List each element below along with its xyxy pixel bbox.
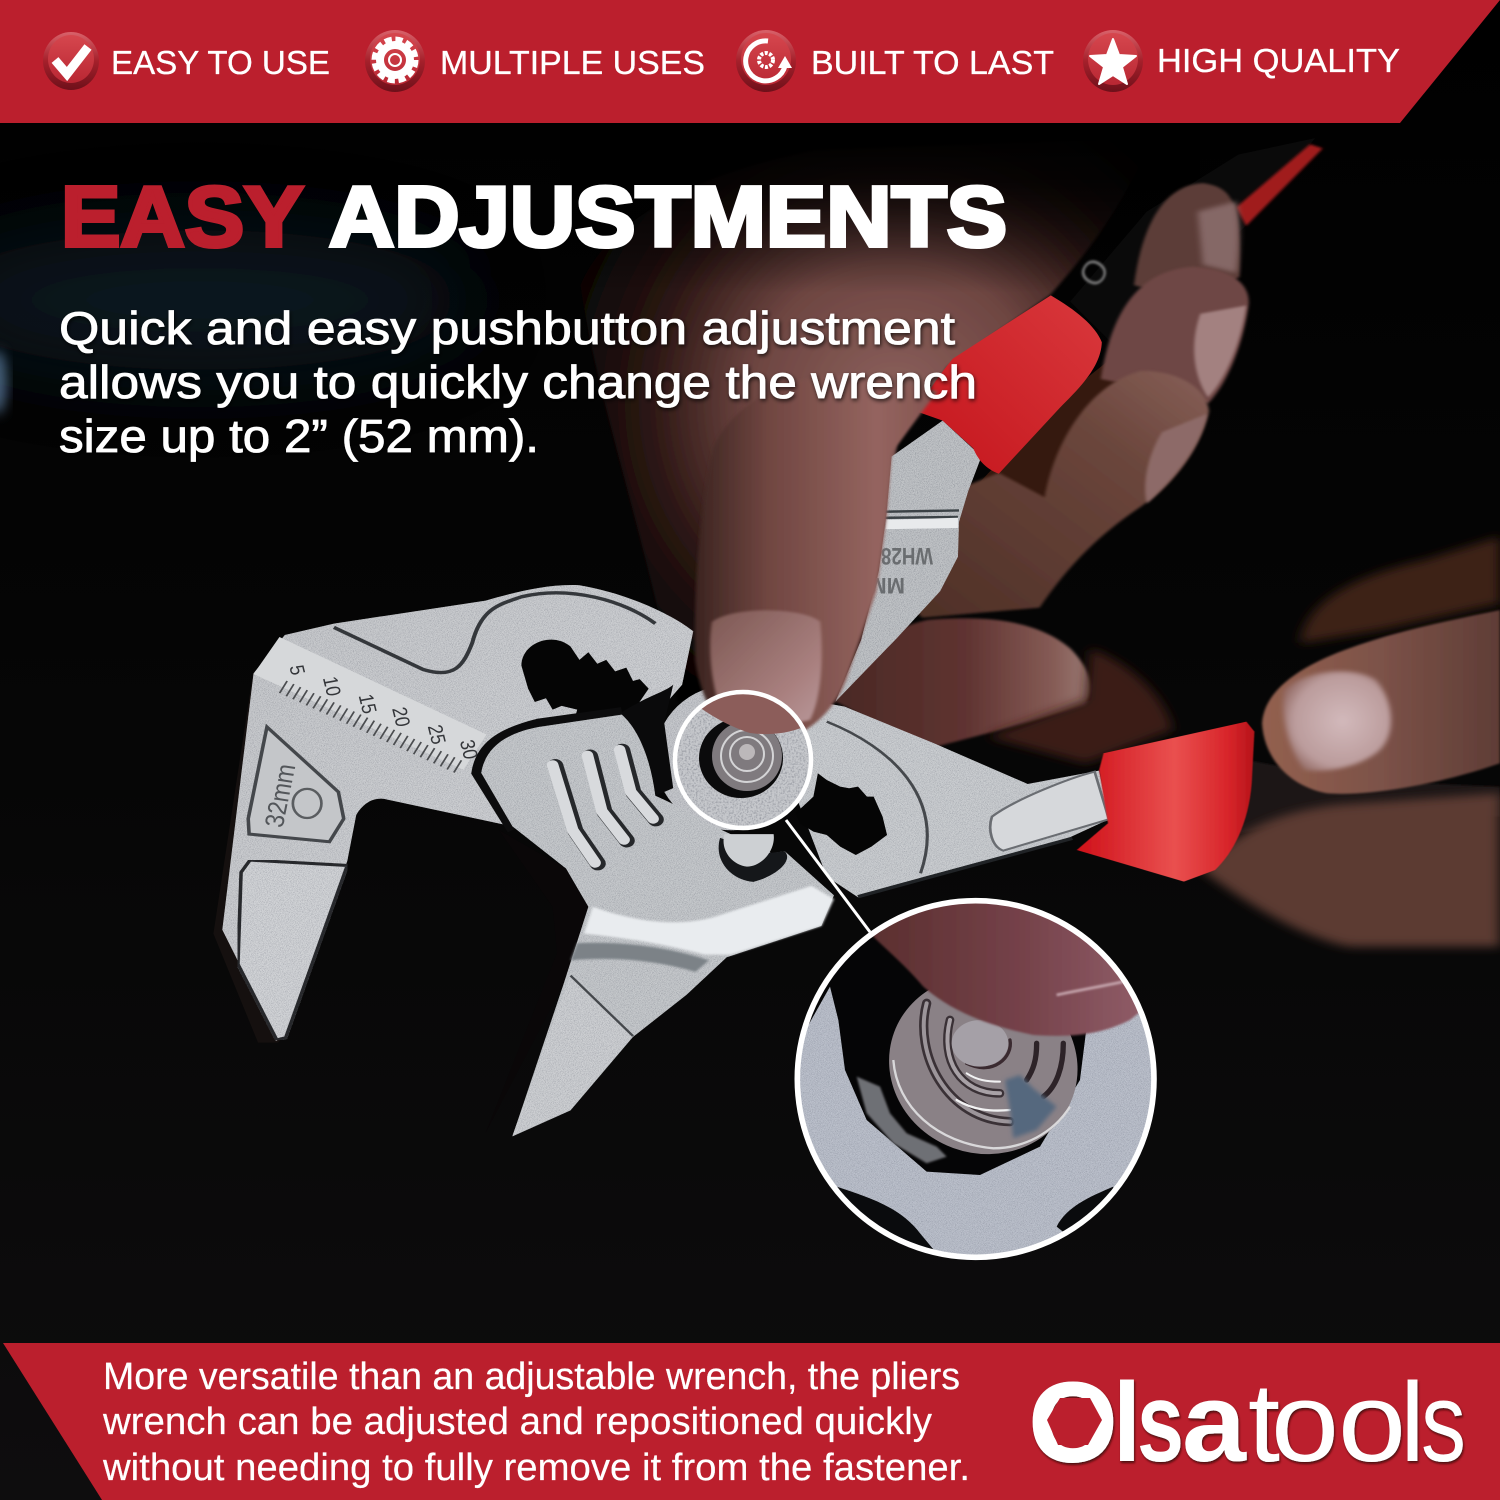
bottom description text: without needing to fully remove it from the fastener. [102, 1447, 970, 1489]
thumb [1262, 610, 1500, 794]
jaw opening shadow [486, 830, 588, 1133]
finger two [1101, 267, 1249, 403]
ruler scale [254, 637, 487, 770]
lower teeth hole [796, 773, 887, 855]
top banner [0, 0, 1500, 123]
ruler scale: 10 [318, 675, 344, 698]
jaw plate edge [571, 976, 633, 1036]
badge: built to last: BUILT TO LAST [811, 44, 1054, 81]
icon: star [1083, 30, 1143, 92]
logo: t [1248, 1360, 1280, 1485]
grey streak on body [571, 943, 709, 972]
ruler scale: 25 [422, 723, 449, 746]
inset fingertip [872, 904, 1139, 1037]
badge: built to last [736, 30, 1054, 92]
photo: left hand holding wrench [560, 123, 1323, 763]
logo: l [1113, 1360, 1141, 1485]
back of hand [580, 138, 1152, 701]
inset lower slots [837, 1186, 934, 1250]
logo: s [1421, 1360, 1466, 1485]
light plate of handle [990, 772, 1109, 851]
connector line to inset [786, 820, 870, 932]
inset button centre [952, 1020, 1008, 1067]
fade of hand into top shadow [560, 123, 1200, 293]
fingernail one [1198, 201, 1239, 273]
front piece shadow edge [477, 712, 622, 830]
dark slot by pivot [620, 685, 673, 796]
red lower grip [1077, 722, 1254, 882]
ruler scale: 5 [284, 663, 308, 677]
description text: Quick and easy pushbutton adjustment [59, 302, 955, 354]
red stripe on handle [1236, 144, 1323, 226]
black handle, lower [1224, 757, 1500, 837]
bottom description text: wrench can be adjusted and repositioned quickly [102, 1401, 932, 1443]
title: EASY [61, 170, 303, 265]
right handle side [773, 703, 1109, 897]
inset button disc [889, 990, 1078, 1154]
ruler scale: 15 [353, 692, 380, 716]
inset dark corner and well [808, 936, 1086, 1175]
upper teeth hole [521, 640, 649, 717]
badge: multiple uses [365, 30, 705, 92]
logo: a [1182, 1360, 1247, 1485]
handle shadow edge [858, 838, 1072, 897]
badge: multiple uses: MULTIPLE USES [440, 44, 705, 81]
finger three and palm [887, 371, 1209, 618]
finger four, behind wrench [836, 618, 1091, 746]
description text: allows you to quickly change the wrench [59, 356, 977, 408]
highlight band [584, 886, 834, 955]
title: ADJUSTMENTS [329, 170, 1007, 265]
handle lettering MM: MM [868, 573, 905, 598]
bottom banner [3, 1343, 1500, 1500]
red upper grip [917, 295, 1102, 474]
blurred finger behind [987, 648, 1173, 763]
lower jaw face [238, 860, 347, 1040]
bottom description text: More versatile than an adjustable wrench, the pliers [103, 1356, 960, 1398]
hex size pad [248, 727, 344, 842]
description text: size up to 2” (52 mm). [59, 410, 539, 462]
thumbnail [1283, 671, 1391, 771]
index finger and nail pressing button [695, 375, 938, 743]
lower jaw plate [512, 976, 632, 1136]
photo: right hand holding handle [1202, 537, 1500, 947]
black handle, upper [1070, 138, 1315, 342]
logo: o [1338, 1360, 1406, 1485]
logo: s [1137, 1360, 1184, 1485]
badge: high quality: HIGH QUALITY [1157, 42, 1400, 79]
handle lettering WH28: WH28 [881, 542, 933, 569]
front moving piece [481, 715, 834, 1136]
handle lettering: O [1071, 251, 1118, 295]
lower finger [1202, 793, 1500, 947]
icon: gear with cycle arrow [736, 30, 796, 92]
logo: o [1271, 1360, 1339, 1485]
hex size pad: 32mm [259, 762, 302, 829]
handle groove [827, 722, 927, 873]
back jaw and body [222, 585, 693, 1041]
top groove [334, 593, 655, 673]
icon: check mark [43, 32, 99, 90]
palm shadow below grip [958, 359, 1137, 538]
inset concentric grooves [924, 1003, 1063, 1122]
inset rim highlight [893, 1060, 1070, 1148]
magnified inset of push button [794, 898, 1157, 1260]
photo: pliers wrench [213, 585, 1254, 1136]
stripe on upper handle [886, 510, 959, 518]
fingernail three [1145, 414, 1207, 504]
badge: easy to use: EASY TO USE [111, 44, 330, 81]
pivot plate [655, 685, 807, 830]
logo: O [1029, 1360, 1117, 1485]
icon: gear [365, 30, 425, 92]
ruler scale: 30 [455, 738, 481, 761]
logo: l [1400, 1360, 1425, 1485]
logo hexagon counter [1047, 1398, 1102, 1445]
wrench dark edge [213, 670, 289, 1043]
detail circle around push button [672, 690, 814, 830]
inset nail line [1057, 982, 1123, 995]
light band on upper handle [886, 518, 958, 529]
logo [1029, 1360, 1466, 1485]
badge: easy to use [43, 32, 330, 90]
inset blue slot [1005, 1075, 1057, 1138]
silver upper handle [836, 421, 981, 701]
ribs on front piece [553, 750, 656, 864]
inset metal surface [800, 986, 1152, 1254]
description text [59, 302, 977, 462]
blurred upper finger [1300, 537, 1500, 643]
bottom description text [102, 1356, 970, 1489]
finger one [1134, 183, 1240, 301]
pin slot below pivot [719, 834, 787, 882]
inset debris [857, 1077, 947, 1163]
ruler scale: 20 [387, 705, 414, 729]
fingernail two [1194, 306, 1246, 397]
badge: high quality [1083, 30, 1400, 92]
